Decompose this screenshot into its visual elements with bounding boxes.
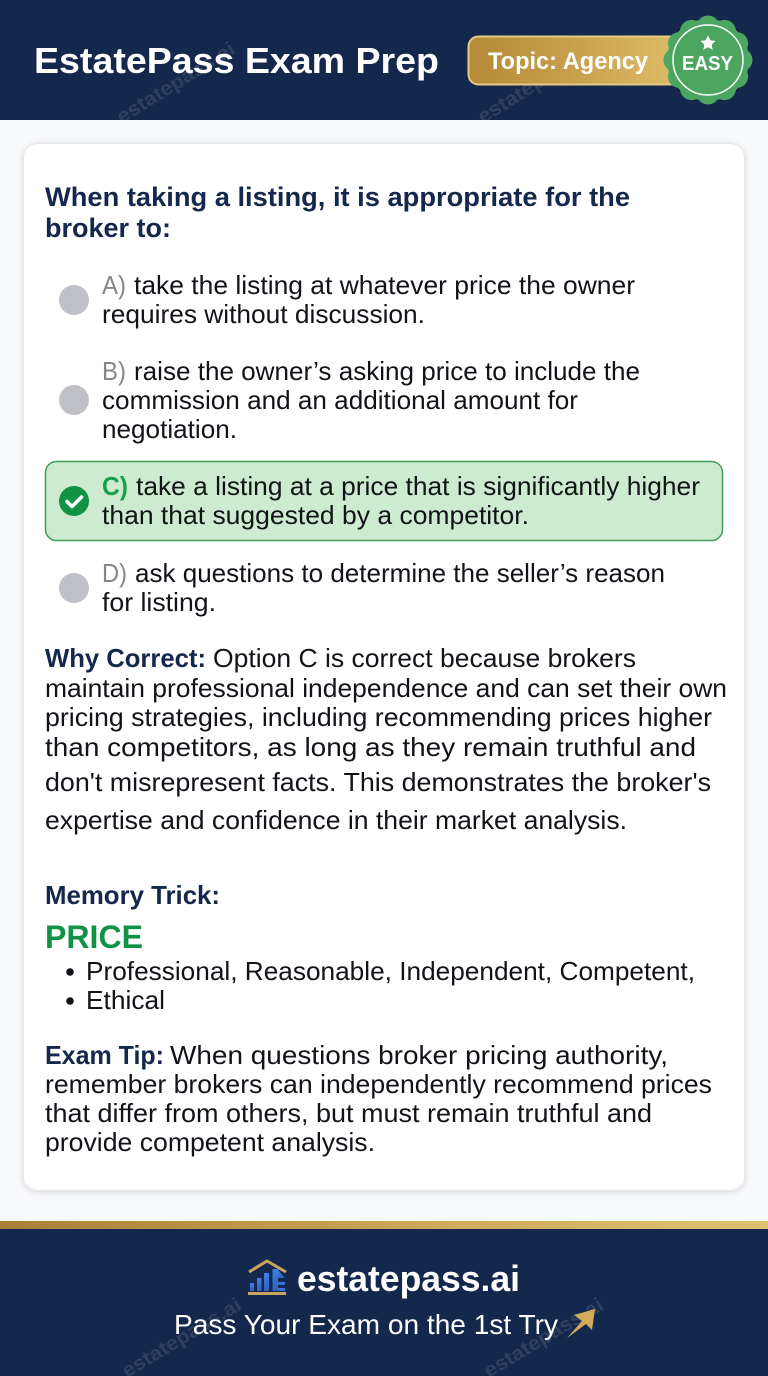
panel: question card (24, 144, 744, 1190)
option B: raise the owner’s asking price to include the (134, 356, 640, 386)
topic badge: Topic: Agency (488, 48, 649, 75)
option D (59, 558, 665, 617)
mnemonic word: PRICE (45, 919, 143, 955)
option A: A) (102, 270, 126, 300)
question heading: When taking a listing, it is appropriate for the (45, 182, 630, 212)
explanation: why correct: than competitors, as long as they remain truthful and (45, 732, 696, 762)
topic badge (468, 36, 694, 84)
mnemonic list: Professional, Reasonable, Independent, Competent, (86, 956, 695, 986)
header band (0, 0, 768, 128)
explanation: why correct: Option C is correct because brokers (213, 643, 636, 673)
option B: negotiation. (102, 414, 237, 444)
exam tip: Exam Tip: (45, 1040, 164, 1070)
tagline: Pass Your Exam on the 1st Try (174, 1309, 558, 1340)
difficulty seal: easy (664, 16, 752, 104)
difficulty seal: easy: EASY (682, 53, 734, 75)
gold divider bar (0, 1221, 768, 1229)
option B (59, 356, 640, 444)
brand name: estatepass.ai (297, 1258, 520, 1299)
option A: take the listing at whatever price the owner (134, 270, 635, 300)
exam tip: provide competent analysis. (45, 1127, 375, 1157)
header band: estatepass.ai (113, 38, 239, 128)
option D: for listing. (102, 587, 216, 617)
option D: ask questions to determine the seller’s reason (135, 558, 665, 588)
memory trick: Memory Trick: (45, 880, 220, 910)
mnemonic list: Ethical (86, 985, 165, 1015)
question heading: broker to: (45, 213, 171, 243)
option A (59, 270, 635, 329)
option C: correct answer: than that suggested by a competitor. (102, 500, 529, 530)
explanation: why correct (45, 643, 727, 835)
explanation: why correct: Why Correct: (45, 643, 206, 673)
explanation: why correct: pricing strategies, including recommending prices higher (45, 702, 712, 732)
option A: requires without discussion. (102, 299, 425, 329)
explanation: why correct: don't misrepresent facts. This demonstrates the broker's (45, 767, 711, 797)
exam tip: remember brokers can independently recommend prices (45, 1069, 712, 1099)
icon: gold arrow (567, 1309, 595, 1338)
exam tip: that differ from others, but must remain truthful and (45, 1098, 652, 1128)
option B: B) (102, 356, 126, 386)
memory trick (45, 880, 695, 1015)
explanation: why correct: maintain professional independence and can set their own (45, 673, 727, 703)
title: EstatePass Exam Prep (34, 40, 439, 81)
icon: house and bar chart logo (248, 1261, 286, 1295)
option B: commission and an additional amount for (102, 385, 578, 415)
exam tip: When questions broker pricing authority, (170, 1040, 668, 1070)
footer band (0, 1229, 768, 1376)
option C: correct answer (46, 462, 722, 540)
icon: star (700, 36, 716, 50)
header band: estatepass.ai (474, 38, 600, 128)
option C: correct answer: take a listing at a price that is significantly higher (136, 471, 700, 501)
question heading (45, 182, 630, 243)
exam tip (45, 1040, 712, 1157)
explanation: why correct: expertise and confidence in their market analysis. (45, 805, 627, 835)
option D: D) (102, 558, 127, 588)
option C: correct answer: C) (102, 471, 128, 501)
mnemonic list (66, 956, 695, 1015)
icon: check mark (59, 486, 89, 516)
